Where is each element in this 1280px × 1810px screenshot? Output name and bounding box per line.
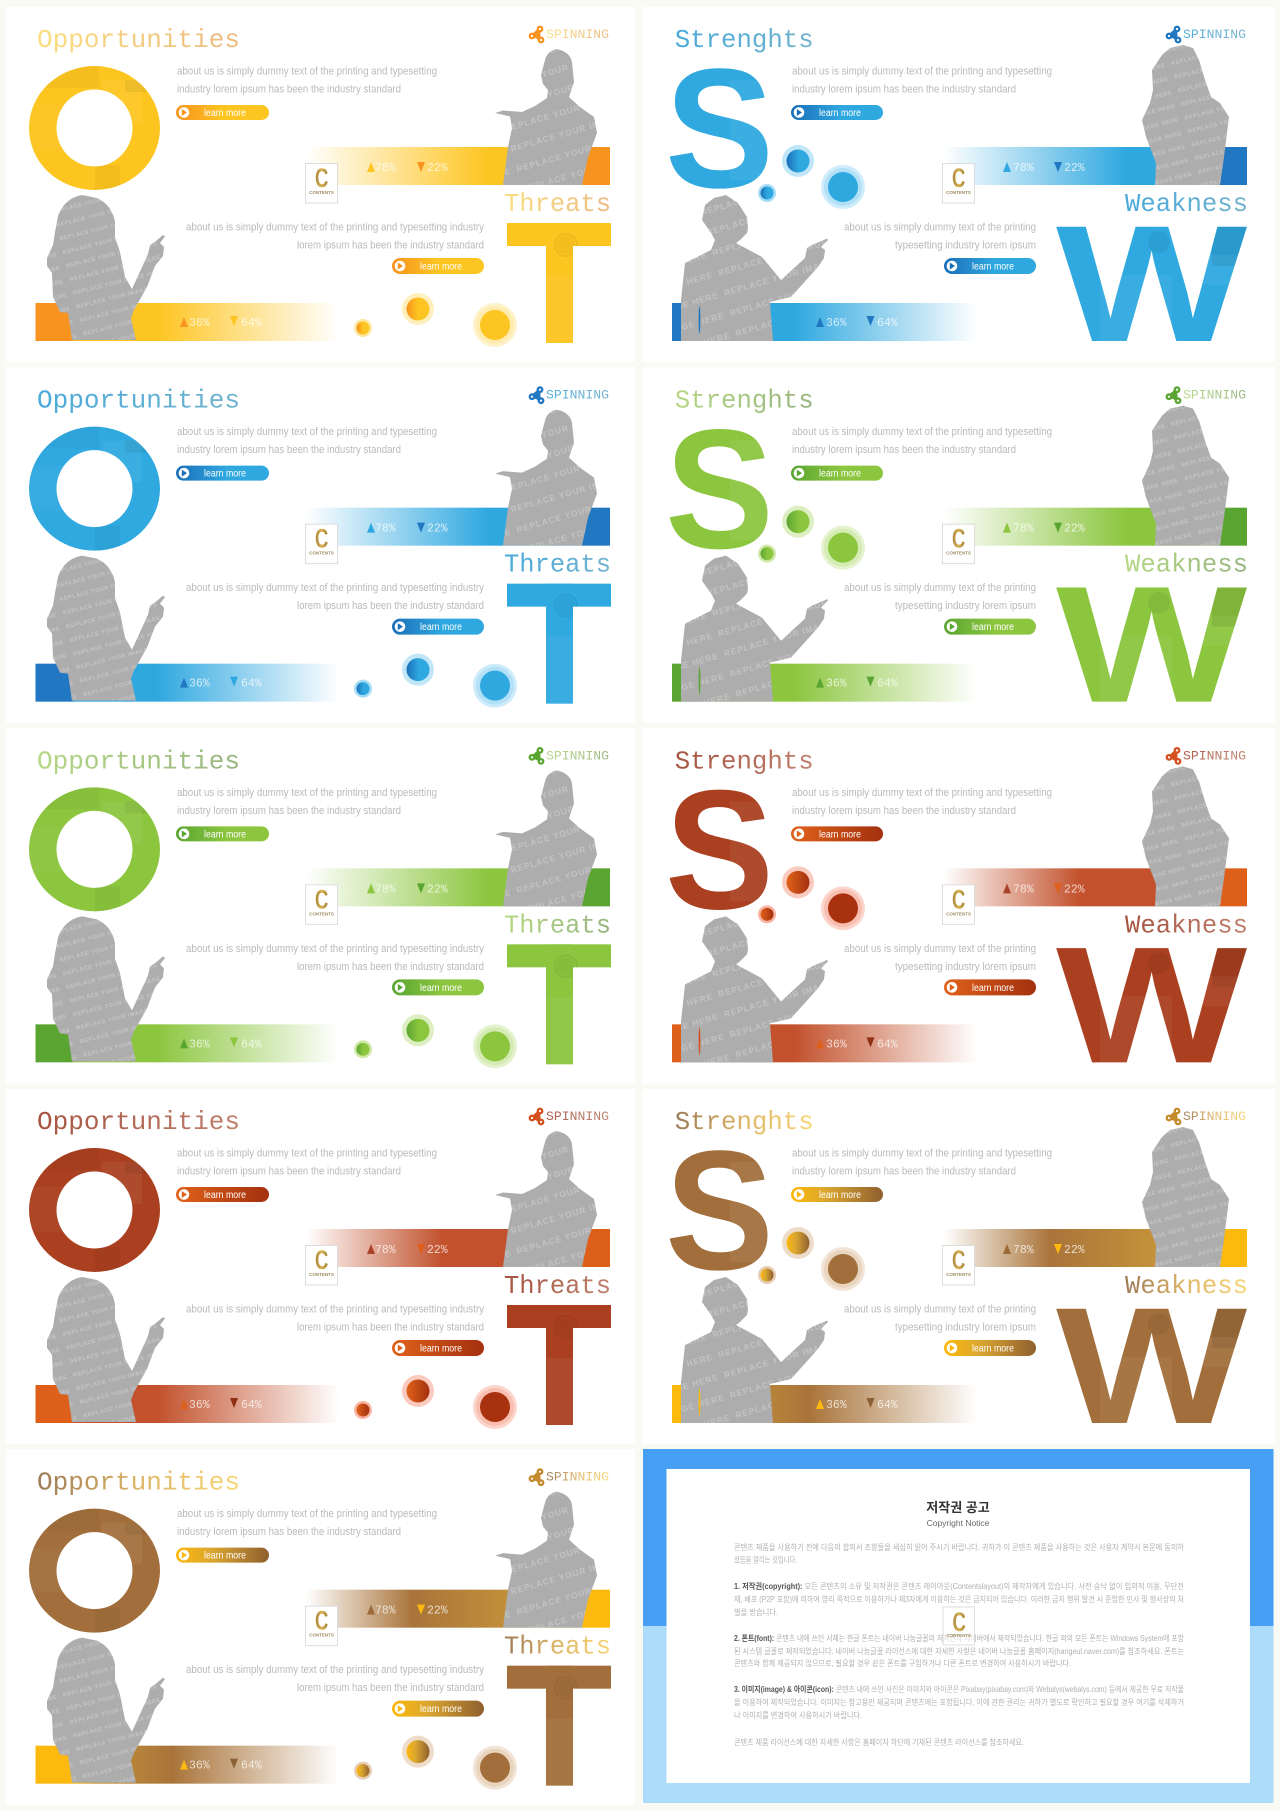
silhouette: woman (47, 916, 165, 1061)
band upper with percentages: 22% (1064, 523, 1085, 536)
C contents badge: C (952, 523, 966, 554)
silhouette: woman from back (1142, 1127, 1229, 1267)
text block upper (792, 787, 1052, 817)
text block lower: typesetting industry lorem ipsum (895, 240, 1036, 252)
silhouette: woman (47, 195, 165, 340)
button lower: learn more (972, 983, 1014, 994)
button upper: learn more (204, 829, 246, 840)
button upper: learn more (819, 469, 861, 480)
text block lower: about us is simply dummy text of the printing and typesetting industry (186, 1304, 484, 1316)
big letter W: W (1056, 552, 1247, 738)
text block upper: about us is simply dummy text of the printing and typesetting (792, 66, 1052, 78)
big letter O (29, 427, 160, 551)
band lower with percentages (36, 1385, 339, 1423)
title: Opportunities: Opportunities (37, 1468, 240, 1498)
title: Opportunities: Opportunities (37, 1107, 240, 1137)
bubbles (758, 866, 865, 930)
button lower (392, 1340, 484, 1356)
button lower: learn more (420, 983, 462, 994)
button upper: learn more (204, 1551, 246, 1562)
button lower (392, 619, 484, 635)
button upper (176, 826, 269, 841)
band upper with percentages: 78% (1013, 883, 1034, 896)
button upper: learn more (204, 108, 246, 119)
C contents badge: CONTENTS (946, 1633, 971, 1638)
band lower with percentages (36, 1746, 339, 1784)
copyright title: 저작권 공고 (926, 1500, 990, 1515)
text block lower (186, 582, 484, 612)
text block upper: about us is simply dummy text of the printing and typesetting (792, 1148, 1052, 1160)
C contents badge (306, 1605, 338, 1646)
band lower with percentages: 64% (877, 678, 898, 691)
logo: SPINNING (1166, 747, 1246, 765)
big letter S: S (665, 395, 774, 584)
logo: SPINNING (529, 26, 609, 43)
band upper with percentages: 78% (375, 162, 396, 175)
panel: Strenghts/Weakness slide, blue (642, 7, 1275, 377)
bubbles (354, 1736, 517, 1790)
text block lower: typesetting industry lorem ipsum (895, 1322, 1036, 1334)
band lower with percentages: 64% (877, 1038, 898, 1051)
copyright body text: 셨음을 알리는 것입니다. (734, 1554, 797, 1564)
text block upper: industry lorem ipsum has been the industry standard (792, 805, 1016, 817)
button lower: learn more (972, 262, 1014, 272)
text block lower (186, 1664, 484, 1694)
title: Opportunities: Opportunities (37, 746, 240, 776)
band lower with percentages (672, 1385, 977, 1423)
button upper (176, 1548, 269, 1563)
logo: SPINNING: SPINNING (546, 1109, 609, 1124)
text block upper (792, 66, 1052, 96)
band upper with percentages (944, 508, 1247, 546)
text block upper (177, 787, 437, 817)
C contents badge: C (315, 162, 329, 193)
panel: Opportunities/Threats slide, red (6, 1089, 635, 1444)
button upper: learn more (819, 829, 861, 840)
button lower: learn more (972, 1344, 1014, 1354)
bubbles (354, 1014, 517, 1068)
C contents badge (306, 1244, 338, 1285)
button upper (791, 826, 883, 841)
bubbles (758, 506, 865, 570)
band lower with percentages: 64% (241, 678, 262, 691)
big letter W: W (1056, 1273, 1247, 1459)
button lower (944, 979, 1036, 995)
copyright body text: 콘텐츠 제품을 사용하기 전에 다음의 합의서 조항들을 세심히 읽어 주시기 바랍니다. 귀하가 이 콘텐츠 제품을 사용하는 것은 사용자 계약서 본문에 동의하 (734, 1542, 1185, 1552)
text block lower: about us is simply dummy text of the printing (844, 943, 1036, 955)
panel: Opportunities/Threats slide, brown (6, 1450, 635, 1805)
text block lower: lorem ipsum has been the industry standard (297, 240, 484, 252)
panel: Strenghts/Weakness slide, brown (642, 1089, 1275, 1459)
silhouette: man (495, 1492, 597, 1628)
logo: SPINNING (529, 1108, 609, 1125)
C contents badge (942, 523, 974, 564)
C contents badge: CONTENTS (946, 190, 971, 195)
logo: SPINNING: SPINNING (1183, 748, 1246, 763)
button lower: learn more (420, 622, 462, 633)
silhouette: man pointing (681, 195, 828, 341)
copyright body text: 을 이용하여 제작되었습니다. 이미지는 참고용만 제공되며 콘텐츠에는 포함됩니다. 이에 관한 권리는 귀하가 별도로 확인하고 필요할 경우 여기를 삭제하거 (734, 1697, 1184, 1707)
band upper with percentages (306, 147, 610, 185)
text block lower: about us is simply dummy text of the printing (844, 582, 1036, 594)
text block lower (844, 1304, 1036, 1334)
copyright body text: 1. 저작권(copyright): 모든 콘텐츠의 소유 및 저작권은 콘텐츠 레이아웃(Contentslayout)의 제작자에게 있습니다. 사전 승낙 없이 임의적 이용, 무단전 (734, 1581, 1184, 1591)
C contents badge: CONTENTS (309, 1272, 334, 1277)
big letter W: W (1056, 913, 1247, 1098)
band lower with percentages: 64% (241, 1760, 262, 1773)
copyright subtitle: Copyright Notice (927, 1518, 990, 1528)
band upper with percentages (306, 868, 610, 906)
logo: SPINNING (1166, 26, 1246, 43)
heading: Threats: Threats (504, 550, 611, 580)
button lower (392, 258, 484, 274)
text block lower: typesetting industry lorem ipsum (895, 961, 1036, 973)
text block lower: about us is simply dummy text of the printing (844, 1304, 1036, 1316)
button upper (176, 105, 269, 120)
heading: Threats: Threats (504, 910, 611, 940)
button upper (791, 466, 883, 481)
band upper with percentages: 22% (427, 162, 448, 175)
big letter O (29, 787, 160, 911)
band lower with percentages (672, 664, 977, 702)
copyright body text: 나 이미지를 변경하여 사용하시기 바랍니다. (734, 1710, 862, 1720)
C contents badge: CONTENTS (309, 911, 334, 916)
band lower with percentages: 36% (189, 1399, 210, 1412)
text block upper: industry lorem ipsum has been the industry standard (177, 84, 401, 96)
title: Opportunities: Opportunities (37, 386, 240, 416)
big letter S: S (665, 34, 774, 224)
button lower: learn more (420, 262, 462, 272)
logo: SPINNING: SPINNING (546, 388, 609, 403)
text block upper: industry lorem ipsum has been the industry standard (177, 444, 401, 456)
band lower with percentages: 36% (826, 317, 847, 330)
C contents badge: C (315, 884, 329, 914)
band upper with percentages: 78% (375, 1605, 396, 1618)
big letter S: S (665, 1116, 774, 1306)
band upper with percentages: 22% (427, 883, 448, 896)
big letter T (507, 1305, 611, 1425)
copyright body text: 2. 폰트(font): 콘텐츠 내에 쓰인 서체는 한글 폰트는 네이버 나눔글꼴의 저작권자 네이버에서 제작되었습니다. 한글 외의 모든 폰트는 Windows System에 포함 (734, 1633, 1185, 1643)
panel: Opportunities/Threats slide, blue (6, 368, 635, 723)
band upper with percentages: 78% (1013, 1244, 1034, 1257)
bubbles (758, 145, 865, 209)
logo: SPINNING (529, 1468, 609, 1486)
silhouette: woman (47, 556, 165, 701)
panel: Strenghts/Weakness slide, red (642, 728, 1275, 1098)
text block upper: about us is simply dummy text of the printing and typesetting (177, 66, 437, 78)
band upper with percentages (944, 147, 1247, 185)
copyright body text: 재, 배포 (P2P 포함)에 의하여 영리 목적으로 이용하거나 제3자에게 이용하는 것은 금지되어 있습니다. 이러한 금지 행위 발견 시 준엄한 민사 및 형사상의 처 (734, 1594, 1184, 1604)
bubbles (354, 293, 517, 347)
big letter T (507, 584, 611, 704)
band lower with percentages: 36% (189, 1760, 210, 1773)
text block upper (177, 66, 437, 96)
silhouette: man (495, 1131, 597, 1267)
text block upper: industry lorem ipsum has been the industry standard (177, 805, 401, 817)
band upper with percentages (944, 868, 1247, 906)
silhouette: woman (47, 1277, 165, 1422)
band upper with percentages (306, 1229, 610, 1267)
text block lower: about us is simply dummy text of the printing (844, 222, 1036, 234)
text block upper: industry lorem ipsum has been the industry standard (792, 1166, 1016, 1178)
silhouette: woman (47, 1638, 165, 1783)
C contents badge (306, 884, 338, 924)
button lower (944, 619, 1036, 635)
copyright body text (734, 1542, 1185, 1747)
logo: SPINNING: SPINNING (546, 1470, 609, 1485)
copyright body text: 벌을 받습니다. (734, 1607, 778, 1617)
text block lower: about us is simply dummy text of the printing and typesetting industry (186, 943, 484, 955)
button upper (176, 1187, 269, 1202)
text block lower (844, 582, 1036, 612)
copyright body text: 콘텐츠 제품 라이선스에 대한 자세한 사항은 홈페이지 하단에 기재된 콘텐츠 라이선스를 참조하세요. (734, 1737, 1024, 1747)
band lower with percentages: 36% (826, 678, 847, 691)
C contents badge (306, 162, 338, 203)
band lower with percentages: 36% (189, 317, 210, 330)
text block lower (186, 943, 484, 973)
C contents badge: C (952, 884, 966, 914)
silhouette: man pointing (681, 556, 828, 702)
text block lower (844, 943, 1036, 973)
silhouette: woman from back (1142, 45, 1229, 185)
text block upper: about us is simply dummy text of the printing and typesetting (177, 787, 437, 799)
C contents badge: CONTENTS (309, 551, 334, 556)
panel: copyright notice (643, 1449, 1274, 1803)
C contents badge: C (315, 523, 329, 554)
button upper (176, 466, 269, 481)
text block lower: about us is simply dummy text of the printing and typesetting industry (186, 222, 484, 234)
button upper: learn more (204, 469, 246, 480)
logo: SPINNING (1166, 386, 1246, 404)
text block upper: about us is simply dummy text of the printing and typesetting (177, 426, 437, 438)
band upper with percentages: 22% (427, 1244, 448, 1257)
band upper with percentages: 22% (427, 1605, 448, 1618)
button upper (791, 1187, 883, 1202)
text block upper: about us is simply dummy text of the printing and typesetting (177, 1148, 437, 1160)
title: Opportunities: Opportunities (37, 25, 240, 55)
C contents badge: CONTENTS (946, 1272, 971, 1277)
text block upper: about us is simply dummy text of the printing and typesetting (177, 1508, 437, 1520)
C contents badge (942, 1244, 974, 1285)
C contents badge (942, 884, 974, 924)
band upper with percentages (306, 508, 610, 546)
silhouette: man pointing (681, 916, 828, 1062)
C contents badge (942, 162, 974, 203)
button lower (392, 1701, 484, 1717)
band upper with percentages: 78% (375, 523, 396, 536)
band lower with percentages: 36% (189, 678, 210, 691)
text block lower (186, 222, 484, 252)
text block upper: industry lorem ipsum has been the industry standard (792, 84, 1016, 96)
panel: Strenghts/Weakness slide, green (642, 368, 1275, 738)
logo: SPINNING (529, 386, 609, 404)
band lower with percentages: 64% (241, 317, 262, 330)
logo: SPINNING: SPINNING (1183, 27, 1246, 42)
C contents badge: C (952, 162, 966, 193)
text block upper: industry lorem ipsum has been the industry standard (177, 1166, 401, 1178)
title: Strenghts: Strenghts (675, 1107, 814, 1137)
heading: Weakness: Weakness (1125, 550, 1248, 580)
button lower: learn more (420, 1344, 462, 1354)
copyright body text: 된 시스템 글꼴로 제작되었습니다. 네이버 나눔글꼴 라이선스에 대한 자세한 사항은 네이버 나눔글꼴 홈페이지(hangeul.naver.com)를 참조하세요. 폰트는 (734, 1646, 1184, 1656)
band upper with percentages: 78% (1013, 523, 1034, 536)
text block upper (177, 1148, 437, 1178)
text block lower: lorem ipsum has been the industry standard (297, 961, 484, 973)
silhouette: man (495, 770, 597, 906)
text block lower: typesetting industry lorem ipsum (895, 600, 1036, 612)
band lower with percentages (36, 303, 339, 341)
title: Strenghts: Strenghts (675, 25, 814, 55)
big letter T (507, 944, 611, 1064)
text block lower: lorem ipsum has been the industry standard (297, 600, 484, 612)
silhouette: man (495, 410, 597, 546)
title: Strenghts: Strenghts (675, 386, 814, 416)
band upper with percentages: 22% (1064, 1244, 1085, 1257)
C contents badge: C (315, 1244, 329, 1275)
button upper: learn more (819, 1190, 861, 1201)
big letter T (507, 1666, 611, 1786)
big letter O (29, 66, 160, 190)
button lower (944, 258, 1036, 274)
button lower (944, 1340, 1036, 1356)
bubbles (354, 1375, 517, 1429)
band lower with percentages: 64% (877, 317, 898, 330)
button upper: learn more (204, 1190, 246, 1201)
band upper with percentages: 22% (1064, 162, 1085, 175)
text block upper (177, 426, 437, 456)
text block lower: lorem ipsum has been the industry standard (297, 1682, 484, 1694)
band lower with percentages: 64% (241, 1038, 262, 1051)
text block lower (186, 1304, 484, 1334)
band lower with percentages: 36% (189, 1038, 210, 1051)
band lower with percentages: 36% (826, 1038, 847, 1051)
silhouette: man (495, 49, 597, 185)
heading: Threats: Threats (504, 1271, 611, 1301)
big letter S: S (665, 755, 774, 945)
silhouette: woman from back (1142, 766, 1229, 906)
logo: SPINNING: SPINNING (546, 27, 609, 42)
text block upper: industry lorem ipsum has been the industry standard (177, 1526, 401, 1538)
band upper with percentages: 78% (375, 1244, 396, 1257)
big letter O (29, 1509, 160, 1633)
heading: Weakness: Weakness (1125, 189, 1248, 219)
band upper with percentages: 22% (1064, 883, 1085, 896)
logo: SPINNING: SPINNING (1183, 1109, 1246, 1124)
C contents badge: CONTENTS (946, 911, 971, 916)
C contents badge: CONTENTS (309, 190, 334, 195)
C contents badge (943, 1606, 974, 1645)
band lower with percentages (672, 303, 977, 341)
big letter T (507, 223, 611, 343)
heading: Threats: Threats (504, 189, 611, 219)
title: Strenghts: Strenghts (675, 746, 814, 776)
text block lower: lorem ipsum has been the industry standard (297, 1322, 484, 1334)
C contents badge (306, 523, 338, 564)
panel: Opportunities/Threats slide, green (6, 728, 635, 1083)
button upper (791, 105, 883, 120)
bubbles (758, 1227, 865, 1291)
band upper with percentages (944, 1229, 1247, 1267)
C contents badge: C (952, 1244, 966, 1275)
band upper with percentages (306, 1590, 610, 1628)
text block upper: about us is simply dummy text of the printing and typesetting (792, 426, 1052, 438)
band lower with percentages: 64% (241, 1399, 262, 1412)
panel: Opportunities/Threats slide, yellow (6, 7, 635, 362)
C contents badge: CONTENTS (309, 1633, 334, 1638)
band lower with percentages (672, 1024, 977, 1062)
band lower with percentages (36, 664, 339, 702)
logo: SPINNING: SPINNING (546, 748, 609, 763)
heading: Weakness: Weakness (1125, 910, 1248, 940)
C contents badge: CONTENTS (946, 551, 971, 556)
text block lower: about us is simply dummy text of the printing and typesetting industry (186, 582, 484, 594)
button lower: learn more (972, 622, 1014, 633)
band upper with percentages: 22% (427, 523, 448, 536)
C contents badge: C (315, 1605, 329, 1636)
big letter O (29, 1148, 160, 1272)
text block upper (792, 1148, 1052, 1178)
band lower with percentages: 36% (826, 1399, 847, 1412)
C contents badge: C (952, 1606, 966, 1637)
silhouette: woman from back (1142, 406, 1229, 546)
logo: SPINNING (1166, 1108, 1246, 1125)
text block upper: about us is simply dummy text of the printing and typesetting (792, 787, 1052, 799)
heading: Threats: Threats (504, 1632, 611, 1662)
logo: SPINNING: SPINNING (1183, 388, 1246, 403)
copyright body text: 3. 이미지(image) & 아이콘(icon): 콘텐츠 내에 쓰인 사진은 이미지와 아이콘은 Pixabay(pixabay.com)와 Webalys(webalys.com) 등에서 제공한 무료 저작물 (734, 1684, 1184, 1694)
button upper: learn more (819, 108, 861, 119)
band lower with percentages: 64% (877, 1399, 898, 1412)
text block upper (792, 426, 1052, 456)
copyright body text: 콘텐츠와 함께 제공되지 않으므로, 필요할 경우 같은 폰트를 구입하거나 다른 폰트로 변경하여 사용하시기 바랍니다. (734, 1658, 1071, 1668)
text block lower: about us is simply dummy text of the printing and typesetting industry (186, 1664, 484, 1676)
logo: SPINNING (529, 747, 609, 765)
band upper with percentages: 78% (1013, 162, 1034, 175)
text block upper: industry lorem ipsum has been the industry standard (792, 444, 1016, 456)
button lower: learn more (420, 1704, 462, 1715)
band lower with percentages (36, 1024, 339, 1062)
bubbles (354, 654, 517, 708)
text block upper (177, 1508, 437, 1538)
heading: Weakness: Weakness (1125, 1271, 1248, 1301)
band upper with percentages: 78% (375, 883, 396, 896)
text block lower (844, 222, 1036, 252)
big letter W: W (1056, 191, 1247, 377)
button lower (392, 979, 484, 995)
silhouette: man pointing (681, 1277, 828, 1423)
